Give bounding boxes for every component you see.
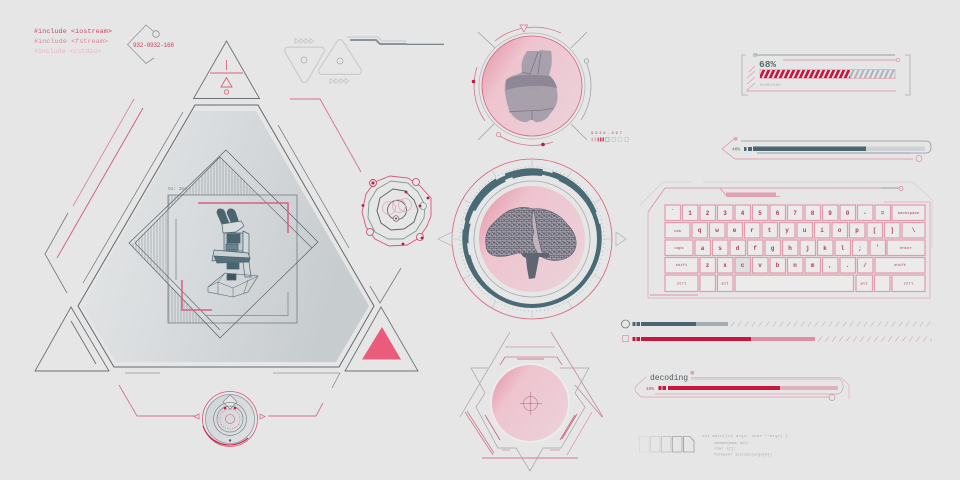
icon: brain (486, 208, 576, 279)
keyboard keys: , (828, 262, 832, 269)
keyboard keys: 7 (793, 210, 797, 217)
keyboard keys: r (750, 227, 754, 234)
rounded triangle modules (288, 37, 444, 84)
keyboard keys: x (723, 262, 727, 269)
keyboard keys: s (718, 245, 722, 252)
keyboard keys: e (733, 227, 737, 234)
keyboard keys: h (788, 245, 792, 252)
bottom round gauge (194, 392, 265, 446)
main hexagon panel (78, 105, 374, 388)
top triangle (194, 41, 260, 98)
keyboard keys: ` (671, 209, 674, 216)
widget: orbit rings (362, 176, 431, 246)
hexagram target (460, 332, 603, 471)
keyboard keys: . (846, 262, 849, 269)
knee scan circle: 9936.397 (591, 132, 623, 136)
keyboard keys: / (863, 262, 867, 269)
code snippet: foreach= initial(args[0]) (714, 452, 772, 458)
progress panel: 68 percent: 68% (759, 59, 776, 70)
keyboard keys: 6 (776, 210, 780, 217)
keyboard keys: l (841, 245, 845, 252)
keyboard keys: \ (912, 227, 916, 234)
keyboard keys: 5 (758, 210, 762, 217)
keyboard keys: u (803, 227, 807, 234)
side accent lines (45, 99, 401, 416)
keyboard keys: ; (858, 245, 862, 252)
keyboard keys: 1 (688, 210, 692, 217)
status bar: dark (622, 320, 932, 328)
header code text (34, 28, 112, 55)
keyboard keys: 9 (828, 210, 832, 217)
keyboard keys (665, 205, 925, 292)
header code text: #include <iostream> (34, 28, 112, 35)
progress panel: loading bar (722, 137, 931, 162)
keyboard keys: z (706, 262, 710, 269)
keyboard keys: f (753, 245, 757, 252)
keyboard keys: v (758, 262, 762, 269)
keyboard keys: 4 (741, 210, 745, 217)
icon: microscope (208, 209, 258, 297)
progress panel: 68 percent: SEARCHING (760, 84, 781, 88)
keyboard keys: - (863, 210, 867, 217)
keyboard keys: 3 (723, 210, 727, 217)
code snippet: char s[]; (714, 446, 736, 452)
keyboard keys: b (776, 262, 780, 269)
progress panel: loading bar: 40% (732, 146, 740, 152)
header code text: #include <fstream> (34, 38, 108, 45)
keyboard keys: k (823, 245, 827, 252)
keyboard keys: alt (860, 282, 868, 286)
code snippet: int main(int argc, char **argv) { (702, 434, 789, 439)
icon: knee joint (505, 50, 558, 122)
bottom left triangle (35, 307, 109, 371)
keyboard keys: 2 (706, 210, 710, 217)
keyboard keys: j (806, 245, 809, 252)
microscope frame: Os: 3mm (168, 186, 187, 192)
keyboard keys: g (771, 245, 775, 252)
keyboard keys: enter (900, 246, 913, 251)
keyboard keys: m (811, 262, 815, 269)
keyboard keys: [ (873, 227, 876, 234)
brain scan circle (438, 159, 626, 319)
code snippet: connect(host, nil) (714, 441, 748, 446)
diamond tag: 932-0932-168 (133, 42, 174, 49)
keyboard keys: t (768, 227, 772, 234)
status bar: red (622, 336, 932, 342)
progress panel: 68 percent (742, 53, 910, 95)
keyboard keys: w (715, 227, 719, 234)
keyboard keys: c (741, 262, 745, 269)
decoding panel (635, 371, 849, 400)
keyboard keys: = (881, 210, 885, 217)
decoding panel: decoding (650, 374, 688, 383)
keyboard keys: y (785, 227, 789, 234)
keyboard keys: q (698, 227, 702, 234)
keyboard keys: ctrl (677, 282, 687, 286)
keyboard keys: shift (675, 263, 688, 268)
knee scan circle (472, 25, 628, 146)
bottom right triangle (345, 307, 418, 371)
keyboard keys: 8 (811, 210, 815, 217)
diamond tag (128, 25, 174, 64)
keyboard keys: alt (721, 282, 729, 286)
keyboard keys: tab (674, 229, 682, 234)
keyboard keys: 0 (846, 210, 850, 217)
keyboard frame (640, 182, 932, 298)
keyboard keys: n (793, 262, 797, 269)
microscope frame (129, 150, 318, 338)
header code text: #include <cstdio> (34, 48, 101, 55)
keyboard keys: ctrl (904, 282, 914, 286)
keyboard keys: a (701, 245, 705, 252)
keyboard keys: i (820, 227, 824, 234)
keyboard keys: p (855, 227, 859, 234)
keyboard keys: caps (674, 247, 684, 251)
code snippet (702, 434, 789, 458)
keyboard keys: ' (876, 244, 879, 251)
keyboard keys: ] (890, 227, 894, 234)
keyboard keys: o (838, 227, 842, 234)
decoding panel: 40% (646, 386, 654, 392)
keyboard keys: d (736, 245, 740, 252)
storage icons (640, 436, 694, 452)
keyboard keys: backspace (898, 211, 920, 216)
keyboard keys: shift (894, 263, 906, 268)
